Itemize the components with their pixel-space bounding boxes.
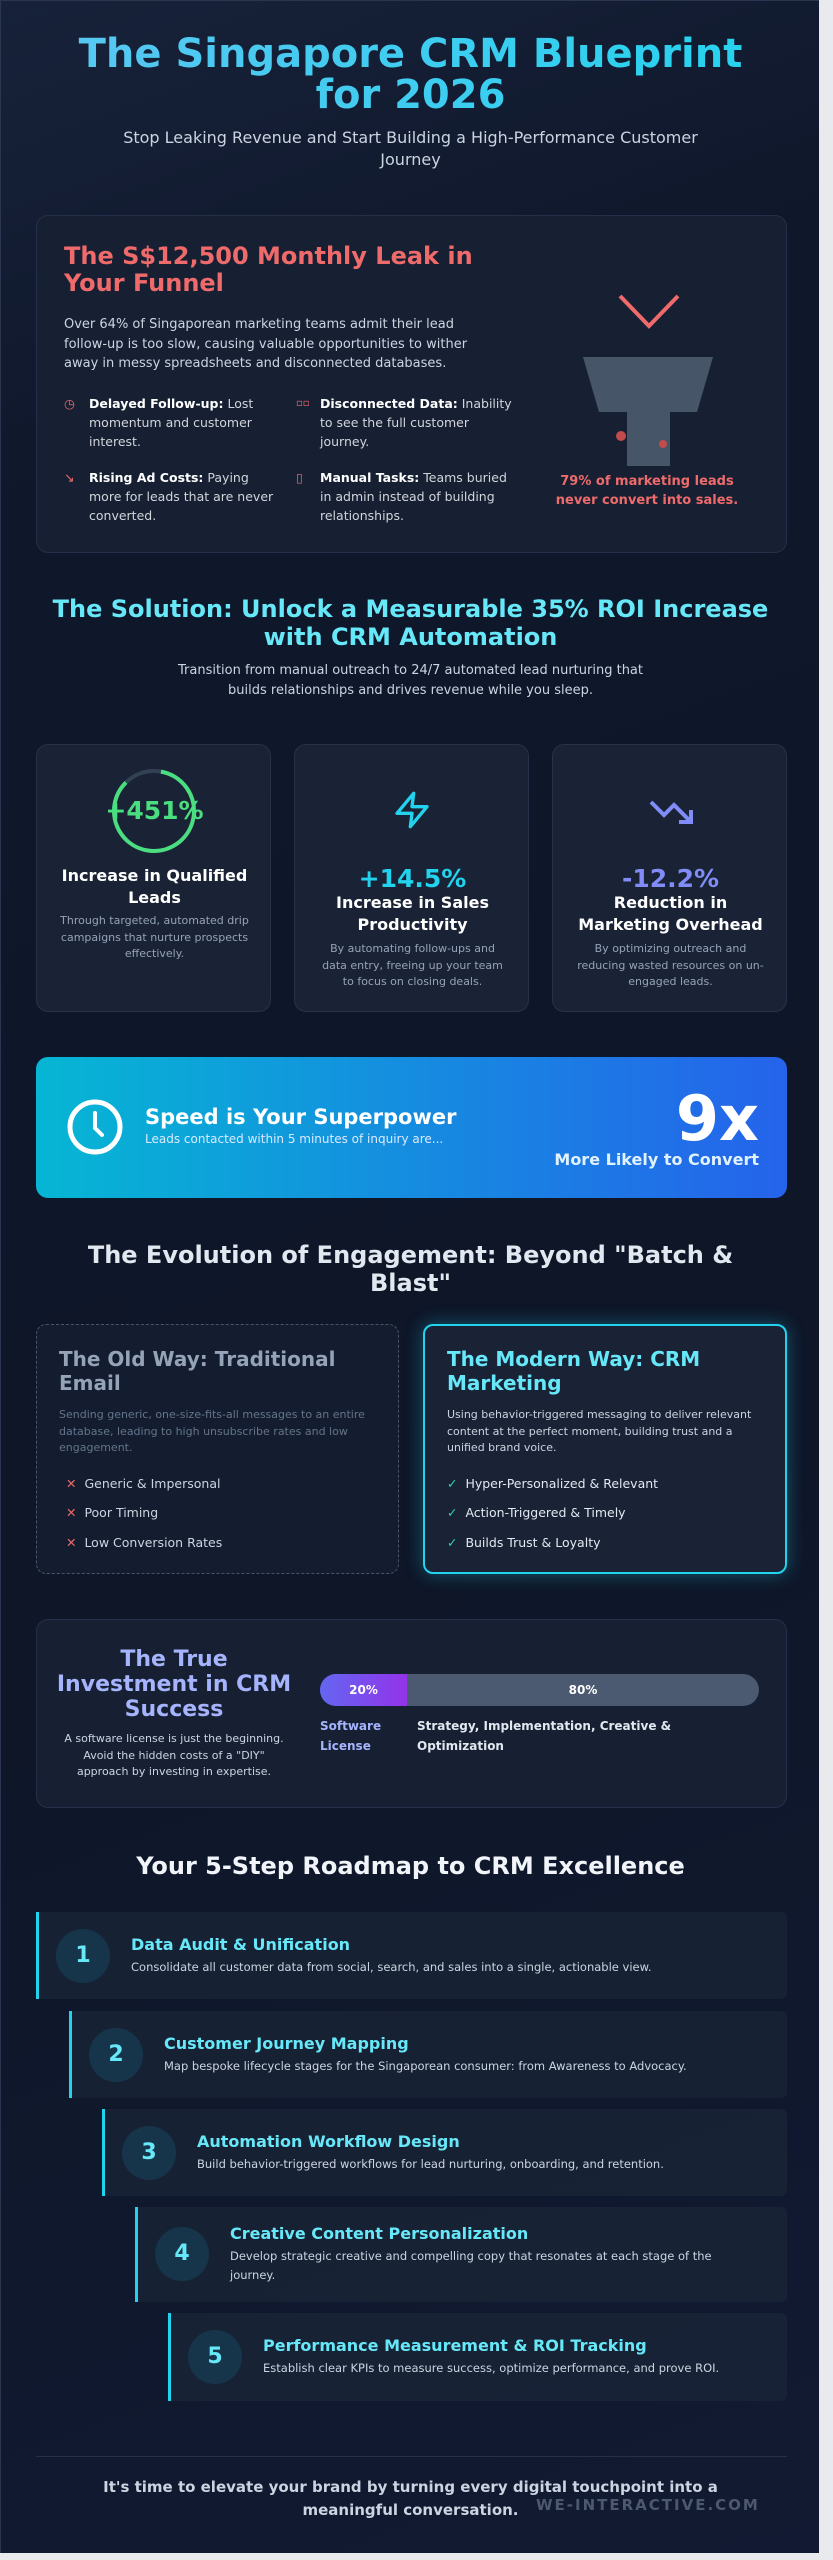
card title: Increase in Sales [336,893,489,912]
desc: Avoid the hidden costs of a "DIY" [83,1748,265,1762]
bullet: rising ad costs [64,470,274,523]
desc: unified brand voice. [447,1441,556,1454]
heading: roadmap: Your 5-Step Roadmap to CRM Excellence [136,1852,685,1880]
card desc: By automating follow-ups and [330,942,495,955]
desc: Using behavior-triggered messaging to deliver relevant [447,1408,751,1421]
step 5: Performance Measurement & ROI Tracking [263,2336,647,2355]
bar chart: 80% [569,1683,597,1697]
bullet: rising ad costs: more for leads that are never [89,489,273,504]
step 4: journey. [230,2268,275,2282]
step 5: Establish clear KPIs to measure success, optimize performance, and prove ROI. [263,2361,719,2375]
callout: 79%: never convert into sales. [556,493,738,508]
step 3 [102,2109,787,2196]
card desc: reducing wasted resources on un- [577,958,764,972]
icon: bolt [395,792,429,828]
watermark: WE-INTERACTIVE.COM [536,2496,760,2514]
card desc: By optimizing outreach and [595,942,746,955]
bullet: rising ad costs: converted. [89,508,156,523]
heading: The Old Way: Traditional [59,1347,336,1371]
legend: strategy: Strategy, Implementation, Creative & [417,1719,671,1733]
desc: engagement. [59,1441,132,1454]
step 1: Data Audit & Unification [131,1935,350,1954]
card title [62,866,247,907]
step 2: Customer Journey Mapping [164,2034,409,2053]
panel heading [64,242,473,297]
step 5 [168,2313,787,2401]
bar chart: 20% [349,1683,378,1697]
heading: solution: The Solution: Unlock a Measurable 35% ROI Increase [53,595,768,623]
legend: software: Software [320,1719,381,1733]
heading [59,1347,336,1395]
bullet: delayed follow-up [64,396,253,449]
paragraph: follow-up is too slow, causing valuable opportunities to wither [64,336,467,352]
card: marketing overhead [552,744,787,1012]
step 2: 2 [108,2042,124,2067]
step 1 [36,1912,787,1999]
step 2: Map bespoke lifecycle stages for the Singaporean consumer: from Awareness to Advocacy. [164,2059,687,2073]
footer text [103,2478,718,2519]
bullet: rising ad costs: Rising Ad Costs: Paying [89,470,249,485]
step 3: Build behavior-triggered workflows for lead nurturing, onboarding, and retention. [197,2157,664,2171]
step 5: 5 [207,2344,223,2369]
big stat 9x: 9x [676,1082,759,1155]
step 1: 1 [75,1943,91,1968]
heading: Marketing [447,1371,562,1395]
bar chart [320,1674,759,1706]
legend: software: License [320,1739,371,1753]
step 4 [135,2207,787,2302]
list: ✓ Hyper-Personalized & Relevant [447,1476,658,1491]
title [1,34,820,116]
desc [447,1408,752,1454]
card desc: campaigns that nurture prospects [61,930,248,944]
paragraph: away in messy spreadsheets and disconnected databases. [64,356,446,371]
panel: modern way [423,1324,787,1574]
card title: Reduction in [614,893,727,912]
bullet: rising ad costs: ↘ [64,470,74,485]
list: ✕ Generic & Impersonal [66,1476,220,1491]
panel heading: Your Funnel [64,269,224,297]
heading [447,1347,700,1395]
subtitle: Stop Leaking Revenue and Start Building a High-Performance Customer [123,128,698,147]
card title: Increase in Qualified [62,866,247,885]
solution subtext [178,663,643,698]
bullet: manual tasks: relationships. [320,508,404,523]
bullet: disconnected data: to see the full customer [320,415,469,430]
legend: strategy: Optimization [417,1739,504,1753]
desc: approach by investing in expertise. [77,1765,271,1778]
callout: 79% [556,474,738,508]
banner: speed [36,1057,787,1198]
stat: -12.2% [622,864,719,893]
list [447,1476,658,1550]
heading: solution [52,595,768,651]
list: ✕ Low Conversion Rates [66,1535,222,1550]
panel: funnel leak [36,215,787,553]
card title: Productivity [357,915,468,934]
banner sub: Leads contacted within 5 minutes of inquiry are... [145,1132,443,1146]
footer text: It's time to elevate your brand by turning every digital touchpoint into a [103,2478,718,2496]
heading: Email [59,1371,121,1395]
list: ✓ Action-Triggered & Timely [447,1505,626,1520]
stat: +451% [105,796,204,825]
step 4: 4 [174,2241,190,2266]
legend: software [320,1719,381,1753]
bullet: disconnected data [296,396,512,449]
panel: old way [36,1324,399,1574]
step 4: Creative Content Personalization [230,2224,528,2243]
card desc: Through targeted, automated drip [60,914,249,927]
solution subtext: builds relationships and drives revenue while you sleep. [228,683,593,698]
legend: strategy [417,1719,671,1753]
desc: database, leading to high unsubscribe rates and low [59,1424,348,1438]
desc: A software license is just the beginning. [64,1732,284,1745]
list [66,1476,222,1550]
panel heading: The S$12,500 Monthly Leak in [64,242,473,270]
bullet: delayed follow-up: momentum and customer [89,415,252,430]
card desc: data entry, freeing up your team [322,958,503,972]
panel: true investment [36,1619,787,1808]
desc [64,1732,284,1778]
bullet: manual tasks [296,470,507,523]
desc [59,1408,365,1454]
ring chart [112,769,196,853]
paragraph: Over 64% of Singaporean marketing teams admit their lead [64,317,454,332]
list: ✕ Poor Timing [66,1505,158,1520]
bullet: delayed follow-up: Delayed Follow-up: Lost [89,396,253,411]
heading: evolution [88,1241,733,1297]
step 3: 3 [141,2140,157,2165]
card desc: engaged leads. [628,975,713,988]
icon: clock [68,1100,122,1154]
step 4: Develop strategic creative and compelling copy that resonates at each stage of the [230,2249,712,2263]
heading: The True [120,1647,228,1672]
card desc: to focus on closing deals. [343,975,482,988]
heading: The Modern Way: CRM [447,1347,700,1371]
card desc [577,942,764,988]
card desc [322,942,503,988]
card desc [60,914,249,960]
step 1: Consolidate all customer data from social, search, and sales into a single, actionable view. [131,1960,652,1974]
title: for 2026 [316,72,505,118]
heading: solution: with CRM Automation [264,623,557,651]
bullet: manual tasks: Manual Tasks: Teams buried [320,470,507,485]
heading [57,1647,291,1722]
card title [336,893,489,934]
callout: 79%: 79% of marketing leads [560,474,734,489]
footer text: meaningful conversation. [302,2501,518,2519]
solution subtext: Transition from manual outreach to 24/7 automated lead nurturing that [178,663,643,678]
heading: evolution: The Evolution of Engagement: Beyond "Batch & [88,1241,733,1269]
list: ✓ Builds Trust & Loyalty [447,1535,600,1550]
title: The Singapore CRM Blueprint [79,31,742,77]
card: qualified leads [36,744,271,1012]
card title [578,893,763,934]
card title: Marketing Overhead [578,915,763,934]
stat label: More Likely to Convert [554,1150,759,1169]
stat: +14.5% [359,864,466,893]
banner title: Speed is Your Superpower [145,1105,456,1129]
step 3: Automation Workflow Design [197,2132,460,2151]
bullet: disconnected data: ▫▫ [296,398,310,409]
step 2 [69,2011,787,2098]
bullet: delayed follow-up: ◷ [64,396,75,411]
icon: trending down [650,800,693,824]
bullet: manual tasks: in admin instead of building [320,489,495,504]
card desc: effectively. [125,947,184,960]
desc: content at the perfect moment, building trust and a [447,1424,733,1438]
heading: Investment in CRM [57,1672,291,1697]
bullet: disconnected data: Disconnected Data: Inability [320,396,512,411]
icon: funnel graphic [583,294,713,466]
subtitle [123,128,698,169]
card title: Leads [128,888,181,907]
bullet: delayed follow-up: interest. [89,434,141,449]
subtitle: Journey [380,150,441,169]
card: sales productivity [294,744,529,1012]
bullet: disconnected data: journey. [320,434,369,449]
desc: Sending generic, one-size-fits-all messages to an entire [59,1408,365,1421]
bullet: manual tasks: ▯ [296,470,303,485]
paragraph [64,317,468,371]
heading: evolution: Blast" [370,1269,451,1297]
heading: Success [125,1697,223,1722]
